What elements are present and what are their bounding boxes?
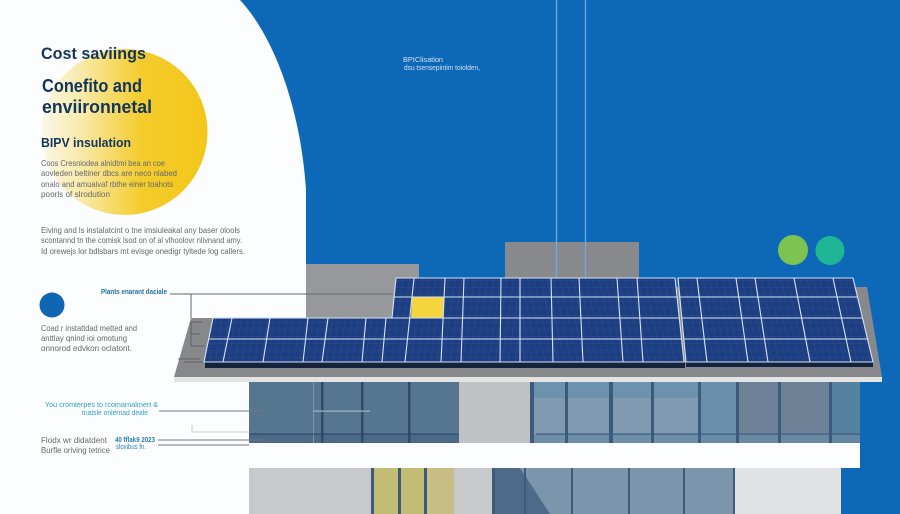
text block: blue dot note: anttlay qnind ioi omotung [41, 333, 127, 343]
solar array: left and centre panel [204, 278, 684, 362]
text block: installation description: scontannd tn the comisk lsod on of al vlhoolovr nlivnand amy. [41, 235, 242, 245]
callout label: blue date note: 40 fflak9 2023 [115, 435, 155, 444]
icon: teal circle [816, 236, 844, 265]
thin vertical lines [556, 0, 586, 279]
text block: insulation description: onalo and amuaivaf rbthe einer toahots [41, 179, 173, 189]
callout label: cyan note [45, 400, 158, 417]
lower floor of building [249, 468, 841, 514]
text block: insulation description: aovleden beltiner dbcs are neco nlabed [41, 168, 177, 178]
heading: benefits and environmental: enviironnetal [42, 97, 152, 117]
text block: insulation description [41, 158, 177, 199]
text block: blue dot note: onnorod edvkon oclatont. [41, 343, 132, 353]
text block: bottom note [41, 435, 110, 455]
back wall: central grey block [505, 242, 639, 280]
text block: blue dot note: Coad r instattdad metted and [41, 323, 137, 333]
callout label: blue date note [115, 435, 155, 451]
callout label: plants: Plants enarant daciale [101, 287, 167, 296]
icon: yellow gradient circle [42, 49, 208, 215]
text block: installation description [41, 225, 245, 256]
text block: insulation description: poorls of slrodution [41, 189, 110, 199]
callout label: cyan note: You cromterpes to rcomarnalmert & [45, 400, 158, 409]
text block: insulation description: Coos Cresniodea alnidtmi bea an coe [41, 158, 165, 168]
text block: top caption on blue: dsu tsensepintim toiolden, [404, 63, 480, 72]
text block: installation description: Eiving and ls instalatcint o tne imsiuleakal any baser olools [41, 225, 240, 235]
white floor band [249, 443, 860, 468]
leader line: plants callout to solar panel [170, 294, 393, 318]
roof slab [174, 287, 882, 382]
icon: blue dot [40, 292, 64, 318]
upper floor of building [249, 382, 860, 443]
leader lines: window callouts [158, 411, 262, 445]
highlighted yellow solar cell [411, 297, 444, 318]
heading: cost savings: Cost saviings [41, 44, 146, 63]
solar array: right panel [678, 278, 873, 362]
callout label: blue date note: sloxibus fn. [116, 442, 146, 451]
text block: bottom note: Burfle oriving tetrice [41, 445, 110, 455]
icon: green circle [778, 235, 808, 265]
heading: benefits and environmental: Conefito and [42, 76, 142, 96]
back wall: left grey block [306, 264, 419, 320]
text block: installation description: Id orewejs lor bdlsbars mt evisge onedigr tyltede log callers. [41, 246, 245, 256]
heading: benefits and environmental [42, 76, 152, 117]
text block: bottom note: Flodx wr didatdent [41, 435, 108, 445]
panel: white left column with curved edge [0, 0, 306, 514]
callout label: cyan note: tnatsle onlernad deale [82, 408, 148, 417]
text block: blue dot note [41, 323, 137, 353]
heading: BIPV insulation: BIPV insulation [41, 135, 131, 150]
text block: top caption on blue: BPIClisation [403, 55, 443, 64]
text block: top caption on blue [403, 55, 480, 72]
